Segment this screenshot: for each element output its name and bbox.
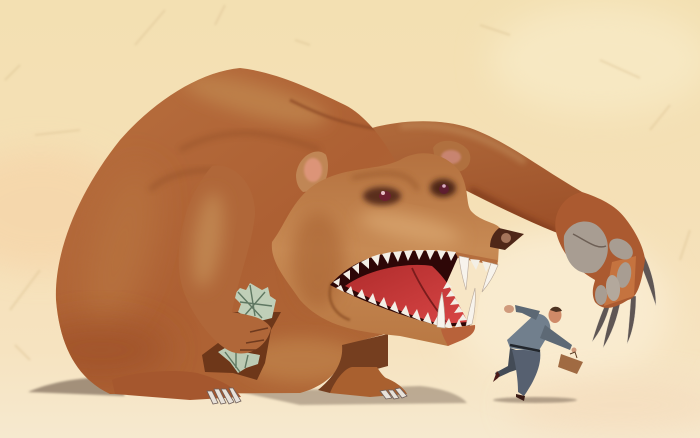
bear nose	[490, 228, 524, 250]
toe pads	[605, 234, 637, 264]
bear right ear	[433, 141, 470, 172]
man's lower arm	[540, 325, 572, 350]
bear near arm and fist	[179, 166, 271, 353]
money in bear's grip	[218, 283, 276, 373]
businessman running	[493, 305, 577, 403]
bear right foot claws	[380, 388, 407, 399]
lower lip tip	[441, 325, 475, 346]
man's torso	[507, 314, 550, 352]
gap between fangs shows background	[447, 257, 500, 326]
man's front leg	[512, 350, 540, 396]
bear far arm reaching right	[372, 121, 582, 232]
man's head	[548, 307, 562, 323]
bear paw with pads	[555, 192, 645, 308]
ground shadows	[28, 378, 467, 405]
upper teeth	[333, 250, 491, 286]
left eye	[363, 187, 401, 205]
right eye	[430, 179, 456, 197]
bear claws on paw	[592, 250, 656, 348]
bear left foot	[112, 371, 241, 404]
man's back leg	[495, 348, 525, 378]
dark belly patch behind money	[202, 312, 281, 380]
lower teeth	[336, 282, 467, 329]
man's raised arm and hand	[515, 305, 540, 320]
main pad	[564, 221, 608, 273]
brow	[352, 173, 418, 190]
fangs	[437, 256, 498, 328]
bear mouth interior and tongue	[330, 251, 500, 326]
bear head	[272, 153, 500, 346]
briefcase	[558, 352, 583, 374]
foot claws	[207, 388, 241, 404]
bear body	[56, 68, 388, 394]
bear left ear	[296, 152, 328, 192]
bear hind leg with dark underside	[318, 334, 407, 397]
man's shadow	[493, 397, 577, 403]
